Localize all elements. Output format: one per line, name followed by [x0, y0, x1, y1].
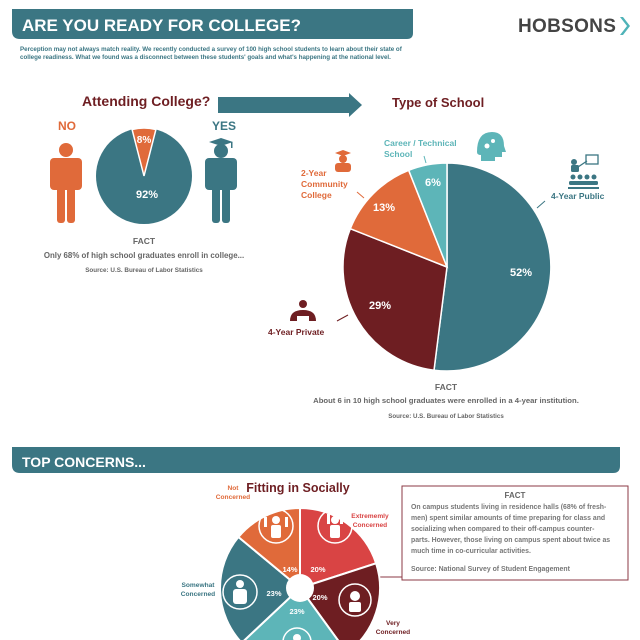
ring chart: fitting in socially [220, 508, 380, 640]
heading: fitting in socially: Fitting in Socially [246, 481, 350, 495]
heading: Attending College?: Attending College? [82, 93, 210, 109]
fact: type of school: FACT [435, 382, 458, 392]
icon: graduate 2-year [335, 150, 351, 172]
ring labels: Concerned [181, 591, 215, 598]
section banner: top concerns [12, 447, 620, 473]
pie labels: type of school: 13% [373, 202, 395, 214]
pie chart: attending college: 92% [136, 189, 158, 201]
pie chart: attending college: 8% [137, 135, 151, 146]
ring labels: Not [228, 485, 239, 492]
icons in ring [223, 509, 371, 640]
ring chart: fitting in socially: 14% [282, 565, 298, 574]
pie chart: attending college [96, 128, 192, 224]
pie labels: type of school: 6% [425, 177, 441, 189]
icon: person NO [50, 143, 82, 223]
fact: attending: Only 68% of high school graduates enroll in college... [44, 251, 244, 260]
ring labels: Somewhat [182, 582, 215, 589]
icon: classroom [568, 155, 599, 189]
fact box: socializing when compared to their off-campus counter- [411, 526, 595, 533]
ring labels [181, 485, 410, 636]
section banner: top concerns: TOP CONCERNS... [22, 454, 146, 470]
label: YES: YES [212, 119, 236, 133]
ring chart: fitting in socially: 20% [310, 565, 326, 574]
ring chart: fitting in socially: 20% [312, 593, 328, 602]
label: career technical [384, 138, 457, 159]
fact box: much time in co-curricular activities. [411, 548, 531, 555]
header banner: ARE YOU READY FOR COLLEGE? [22, 16, 301, 35]
intro text: college readiness. What we found was a disconnect between these students' goals and what's happening at the national level. [20, 54, 391, 61]
pie labels: type of school: 29% [369, 300, 391, 312]
label: 4-year public: 4-Year Public [551, 191, 605, 201]
pie chart: type of school [343, 163, 551, 371]
icon: 4-year private [290, 300, 316, 321]
label: career technical: Career / Technical [384, 138, 457, 148]
label: 2-year community college: 2-Year [301, 168, 327, 178]
pie labels: type of school: 52% [510, 267, 532, 279]
fact: attending [44, 236, 244, 274]
icon: graduate YES [205, 138, 237, 223]
intro text [20, 46, 403, 61]
arrow [218, 93, 362, 117]
ring labels: Concerned [376, 629, 410, 636]
fact: attending: FACT [133, 236, 156, 246]
fact box [402, 486, 628, 580]
fact: type of school: About 6 in 10 high school graduates were enrolled in a 4-year institution. [313, 396, 579, 405]
ring labels: Very [386, 620, 400, 627]
label: 4-year private: 4-Year Private [268, 327, 325, 337]
ring chart: fitting in socially: 23% [289, 607, 305, 616]
fact box: On campus students living in residence halls (68% of fresh- [411, 504, 607, 511]
icon: head with gears [477, 132, 506, 161]
label: 2-year community college: College [301, 190, 332, 200]
ring labels: Concerned [353, 522, 387, 529]
logo: HOBSONS: HOBSONS [518, 16, 616, 37]
label: career technical: School [384, 149, 412, 159]
header banner [12, 9, 413, 39]
pie labels: type of school [369, 177, 532, 312]
fact: attending: Source: U.S. Bureau of Labor Statistics [85, 267, 203, 274]
leader lines [337, 156, 545, 321]
label: 2-year community college [301, 168, 348, 200]
fact: type of school: Source: U.S. Bureau of Labor Statistics [388, 413, 504, 420]
ring labels: Extrememly [351, 513, 389, 520]
ring labels: Concerned [216, 494, 250, 501]
intro text: Perception may not always match reality. We recently conducted a survey of 100 high school students to learn about their state of [20, 46, 403, 53]
ring chart: fitting in socially: 23% [266, 589, 282, 598]
fact box: Source: National Survey of Student Engagement [411, 566, 571, 573]
fact box: men) spent similar amounts of time preparing for class and [411, 515, 605, 522]
fact box: parts. However, those living on campus spent about twice as [411, 537, 610, 544]
label: 2-year community college: Community [301, 179, 348, 189]
heading: Type of School: Type of School [392, 95, 484, 110]
fact: type of school [313, 382, 579, 420]
fact box: FACT [505, 491, 526, 500]
connector line [380, 576, 402, 578]
label: NO: NO [58, 119, 76, 133]
